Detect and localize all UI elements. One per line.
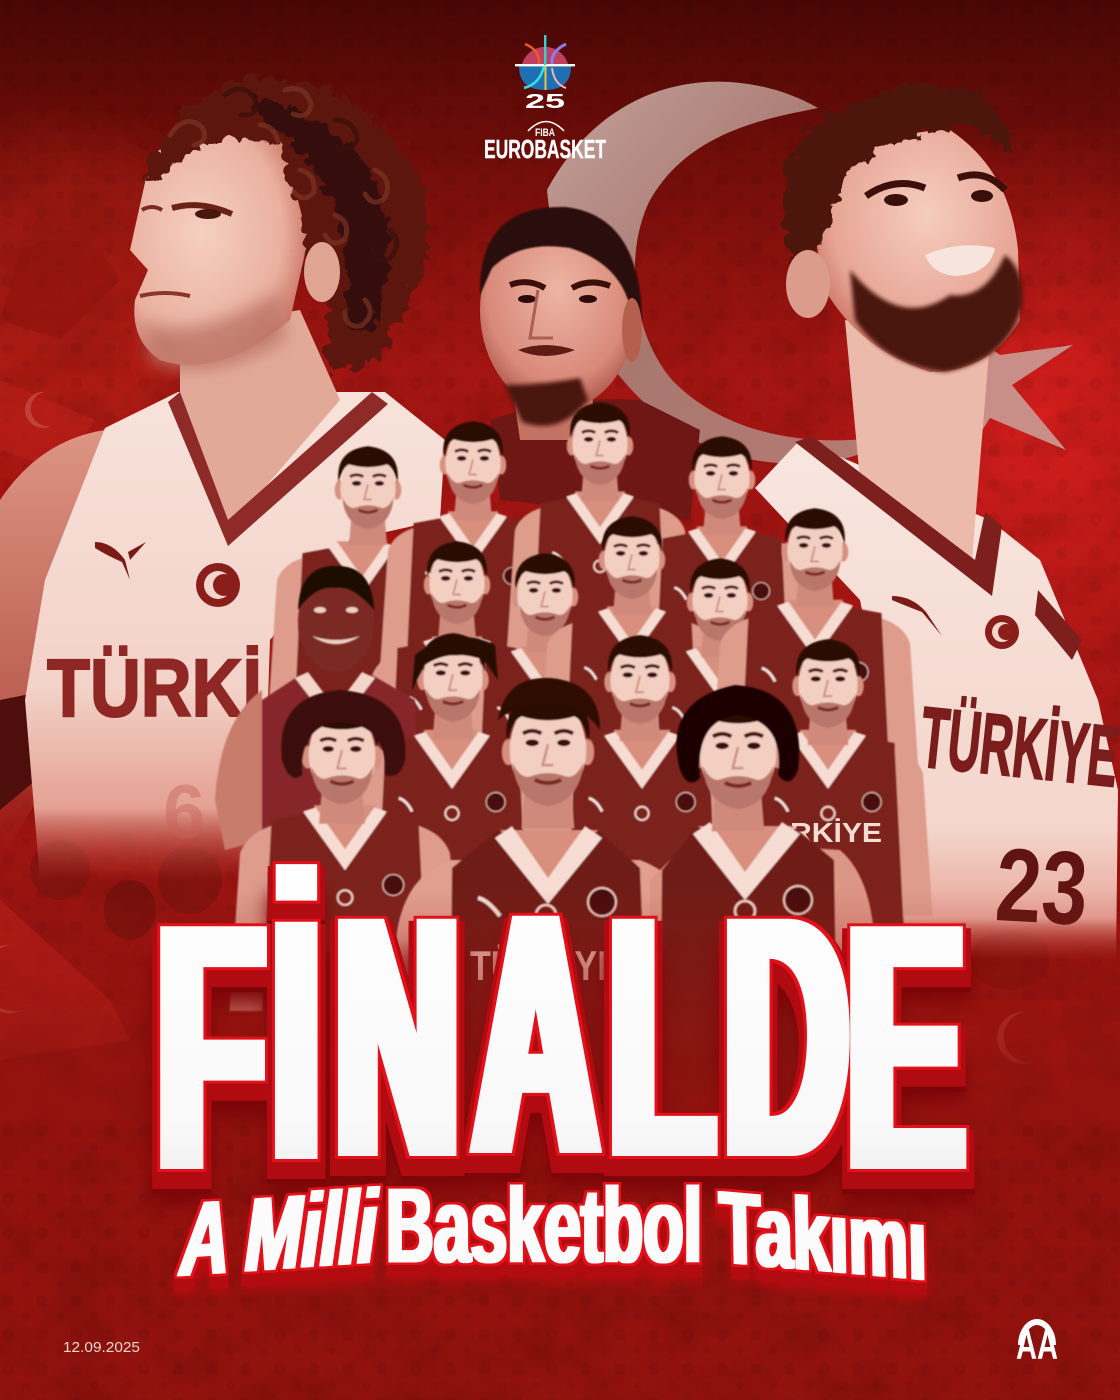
left player hair <box>135 72 423 367</box>
right player badge <box>985 615 1019 649</box>
team jersey text: third row: RKİYE <box>790 817 882 848</box>
team: front right player <box>650 685 875 1110</box>
subtitle word group three: Takımı <box>718 1169 928 1302</box>
flag: star <box>900 340 1073 480</box>
left player: Cedi <box>0 72 445 880</box>
logo FIBA: FIBA <box>535 127 555 139</box>
subtitle: A Milli Basketbol Takimi <box>174 1167 928 1302</box>
logo arc <box>528 122 564 131</box>
subtitle word group one: A Milli <box>174 1168 386 1299</box>
crowd and small flags background <box>0 240 1070 1090</box>
title: FİNALDE: İ <box>272 849 320 1231</box>
right player collar <box>795 436 1002 596</box>
right player puma logo <box>892 596 942 636</box>
coach <box>480 207 700 520</box>
left player number: 6 <box>163 770 205 855</box>
date: 12.09.2025 <box>63 1340 140 1356</box>
left player jersey <box>25 392 445 880</box>
right player: Alperen <box>755 80 1120 960</box>
bottom fade <box>0 900 1120 1400</box>
team: front centre player <box>395 678 710 1120</box>
right player neck <box>845 320 990 560</box>
right player face <box>812 130 1020 372</box>
subtitle word group two: Basketbol <box>386 1167 702 1285</box>
left player face <box>130 124 308 365</box>
logo ball <box>515 35 575 90</box>
logo: FIBA EuroBasket 25 <box>484 35 606 164</box>
right player tournament patch <box>1035 590 1082 660</box>
logo 25: 25 <box>525 91 565 113</box>
title: FİNALDE: F <box>158 852 264 1243</box>
icon: AA logo <box>1016 1319 1058 1368</box>
title: FİNALDE: L <box>610 846 714 1228</box>
team: dark skinned player <box>215 566 420 860</box>
title: FİNALDE: A <box>474 843 597 1225</box>
team: back row <box>268 402 816 759</box>
left player jersey text: TÜRKİ <box>47 643 262 734</box>
title: FİNALDE <box>158 843 964 1243</box>
title: FİNALDE: D <box>725 846 848 1228</box>
logo EUROBASKET: EUROBASKET <box>484 134 606 164</box>
right player number: 23 <box>993 827 1091 948</box>
team jersey text: front centre: TÜRKİYE <box>470 942 620 989</box>
icon: AA logo: AA <box>1016 1321 1058 1368</box>
flag: crescent <box>547 82 892 464</box>
title: FİNALDE: E <box>848 852 964 1243</box>
left player collar <box>168 392 388 546</box>
left player badge <box>196 563 240 607</box>
right player hair <box>777 80 1005 262</box>
team group <box>215 402 932 1120</box>
left player arm <box>0 430 105 860</box>
left player puma logo <box>95 542 146 580</box>
right player jersey <box>755 440 1118 960</box>
team: second row <box>364 508 920 864</box>
left player neck <box>180 310 340 530</box>
team: front left player <box>230 690 460 1074</box>
team: third row <box>348 633 932 973</box>
title: FİNALDE: N <box>336 846 459 1228</box>
